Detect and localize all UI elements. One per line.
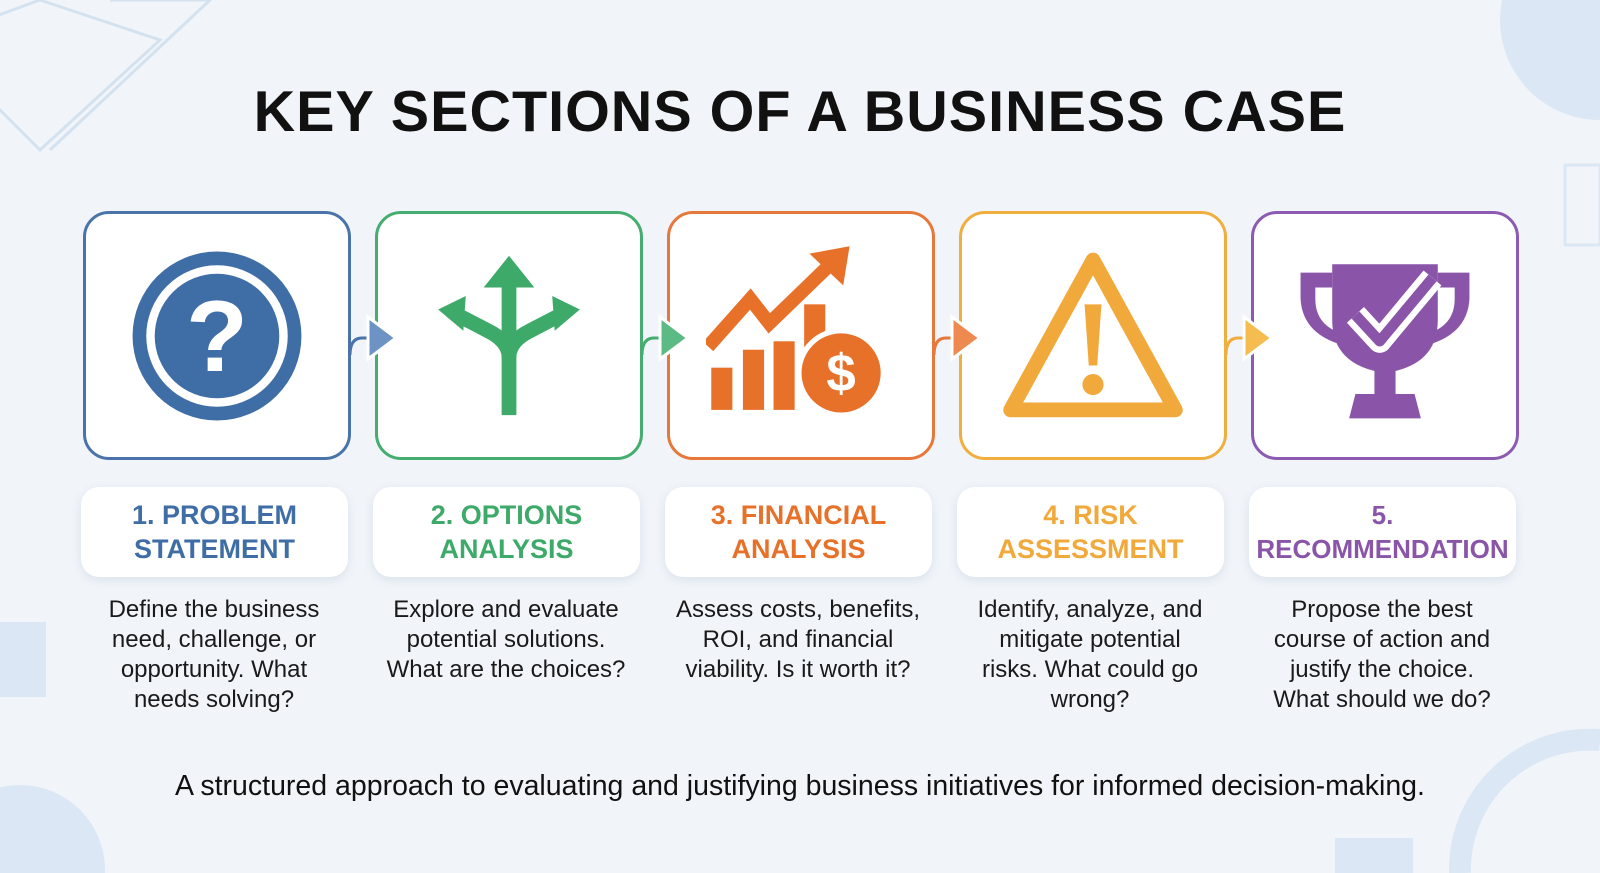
- label: 2: 2. OPTIONS: [431, 500, 582, 530]
- label: 3: ANALYSIS: [731, 534, 866, 564]
- panel: financial analysis icon box: [667, 211, 935, 460]
- icon: branching arrows: [438, 256, 580, 416]
- text: desc 3: Assess costs, benefits, ROI, and financial viability. Is it worth it?: [676, 596, 920, 683]
- panel: options analysis icon box: [375, 211, 643, 460]
- footer text: A structured approach to evaluating and justifying business initiatives for informed decision-making.: [175, 770, 1425, 802]
- label: 1: [81, 487, 348, 577]
- text: desc 1: Define the business need, challenge, or opportunity. What needs solving?: [109, 596, 319, 713]
- label: 4: ASSESSMENT: [997, 534, 1184, 564]
- label: 3: 3. FINANCIAL: [711, 500, 886, 530]
- icon: trophy with check: [1300, 264, 1470, 418]
- label: 1: 1. PROBLEM: [132, 500, 297, 530]
- arrow 2: [643, 314, 686, 362]
- label: 2: ANALYSIS: [439, 534, 574, 564]
- panel: problem statement icon box: [83, 211, 351, 460]
- icon: chart and dollar: [706, 246, 881, 412]
- text: desc 2: Explore and evaluate potential solutions. What are the choices?: [387, 596, 625, 683]
- text: desc 5: Propose the best course of action and justify the choice. What should we do?: [1273, 596, 1491, 713]
- icon: warning triangle: [1003, 252, 1183, 418]
- label: 4: [957, 487, 1224, 577]
- icon: chart and dollar: $: [826, 344, 856, 403]
- panel: risk assessment icon box: [959, 211, 1227, 460]
- arrow 1: [351, 314, 394, 362]
- icon: question mark: [132, 252, 302, 420]
- label: 5: 5.: [1372, 500, 1393, 530]
- panel: recommendation icon box: [1251, 211, 1519, 460]
- arrow 4: [1227, 314, 1270, 362]
- label: 5: [1249, 487, 1516, 577]
- label: 2: [373, 487, 640, 577]
- text: desc 4: Identify, analyze, and mitigate potential risks. What could go wrong?: [977, 596, 1203, 713]
- label: 4: 4. RISK: [1043, 500, 1138, 530]
- arrow 3: [935, 314, 978, 362]
- label: 1: STATEMENT: [134, 534, 295, 564]
- label: 5: RECOMMENDATION: [1256, 534, 1509, 564]
- icon: question mark: ?: [186, 280, 248, 393]
- label: 3: [665, 487, 932, 577]
- title: KEY SECTIONS OF A BUSINESS CASE: [254, 80, 1346, 144]
